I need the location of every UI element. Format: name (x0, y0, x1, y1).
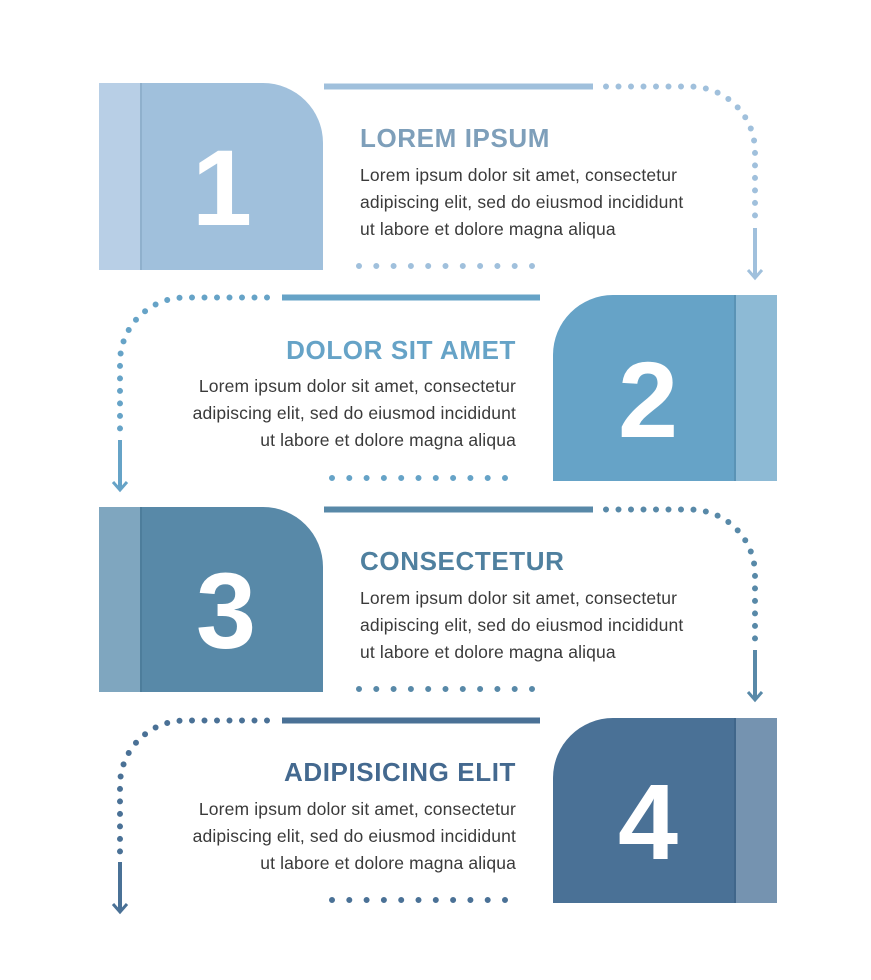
text 4: ut labore et dolore magna aliqua (260, 853, 516, 873)
text 2: Lorem ipsum dolor sit amet, consectetur (199, 376, 516, 396)
text 4: Lorem ipsum dolor sit amet, consectetur (199, 799, 516, 819)
text 2: adipiscing elit, sed do eiusmod incididunt (193, 403, 516, 423)
step 3 (99, 507, 762, 700)
text 3: ut labore et dolore magna aliqua (360, 642, 616, 662)
text 2: ut labore et dolore magna aliqua (260, 430, 516, 450)
block 1: 1 (192, 127, 252, 248)
text 3: Lorem ipsum dolor sit amet, consectetur (360, 588, 677, 608)
text 1: ut labore et dolore magna aliqua (360, 219, 616, 239)
connector 3 (324, 510, 762, 700)
text 1: adipiscing elit, sed do eiusmod incididunt (360, 192, 683, 212)
connector 2 (113, 298, 540, 490)
block 3 (99, 507, 323, 692)
block 1 (99, 83, 323, 270)
text 3: adipiscing elit, sed do eiusmod incididunt (360, 615, 683, 635)
connector 1 (324, 86, 762, 278)
block 4: 4 (618, 761, 678, 882)
text 1: Lorem ipsum dolor sit amet, consectetur (360, 165, 677, 185)
block 3: 3 (196, 550, 256, 671)
text 3: CONSECTETUR (360, 546, 564, 576)
step 2 (113, 295, 777, 490)
text 4: ADIPISICING ELIT (284, 757, 516, 787)
text 3 (360, 546, 683, 662)
connector 4 (113, 720, 540, 912)
block 4 (553, 718, 777, 903)
block 2 (553, 295, 777, 481)
text 1: LOREM IPSUM (360, 123, 550, 153)
text 2 (193, 335, 516, 450)
text 4 (193, 757, 516, 873)
step 1 (99, 83, 762, 278)
text 1 (360, 123, 683, 239)
block 2: 2 (618, 339, 678, 460)
text 2: DOLOR SIT AMET (286, 335, 516, 365)
text 4: adipiscing elit, sed do eiusmod incididunt (193, 826, 516, 846)
step 4 (113, 718, 777, 912)
